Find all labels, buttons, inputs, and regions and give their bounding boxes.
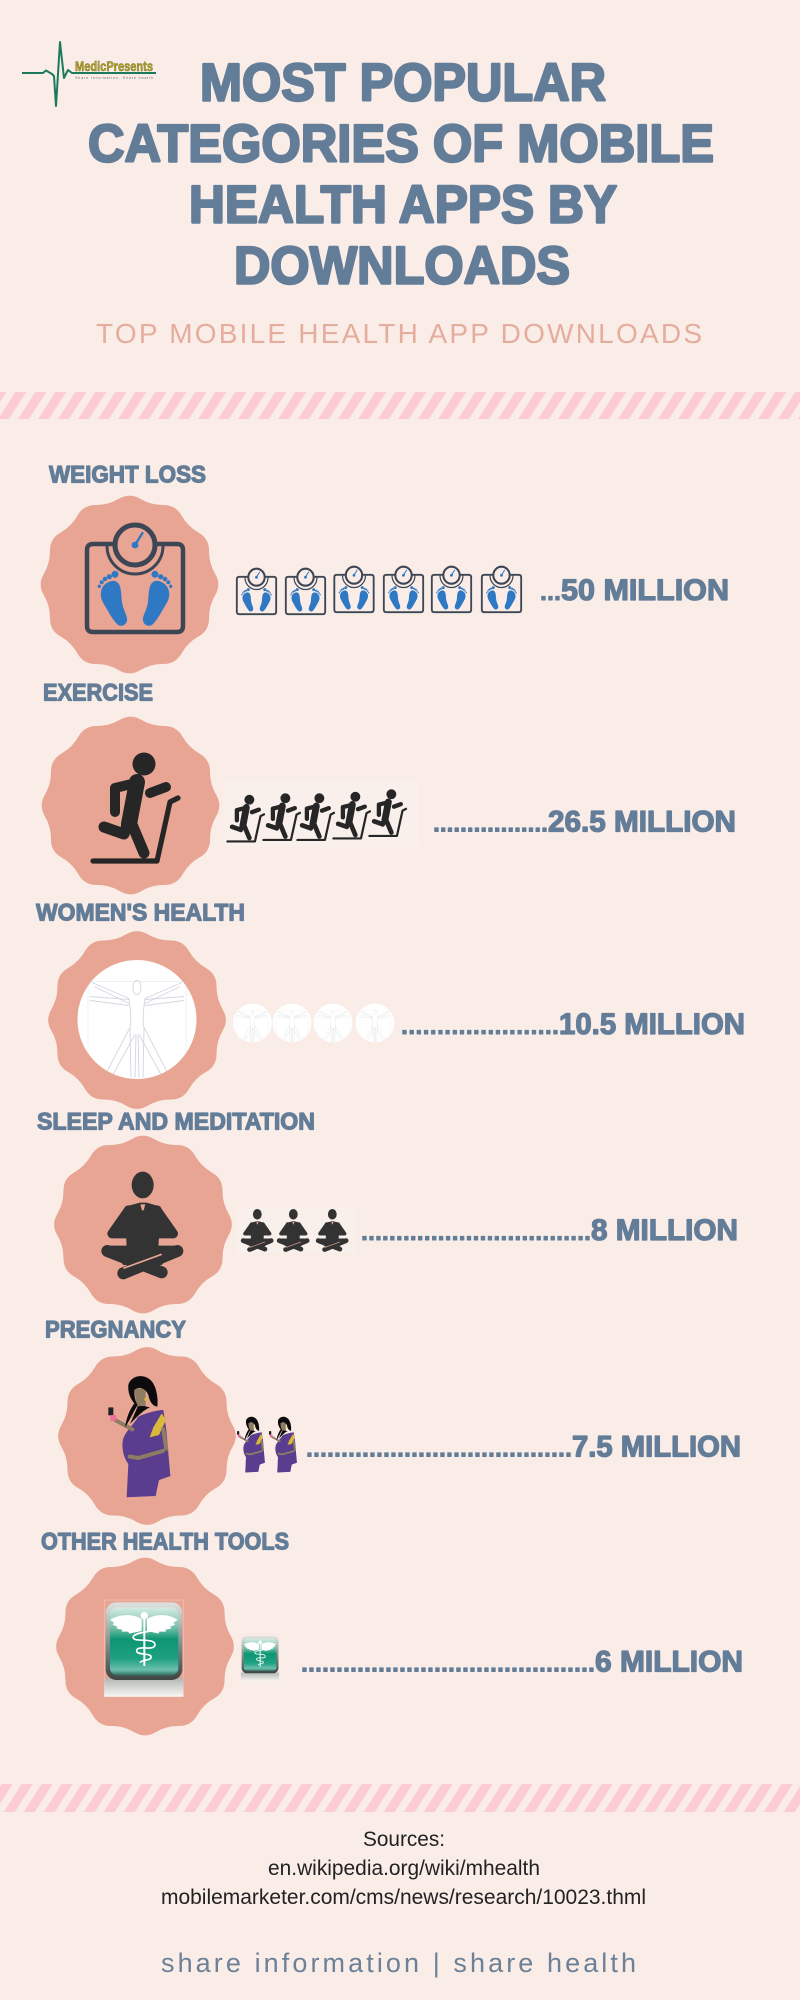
panel: exercise bbox=[42, 680, 736, 894]
sources: en.wikipedia.org/wiki/mhealth bbox=[268, 1857, 540, 1880]
pictogram row: four figures bbox=[233, 1004, 394, 1046]
value: 8 million bbox=[361, 1214, 738, 1247]
panel: pregnancy bbox=[45, 1316, 741, 1525]
value: 8 million: 8 MILLION bbox=[591, 1214, 738, 1247]
pictogram row: three meditators bbox=[237, 1207, 356, 1253]
value: 6 million bbox=[301, 1646, 743, 1678]
tagline: share information | share health bbox=[161, 1948, 636, 1978]
heading: sleep and meditation: SLEEP AND MEDITATION bbox=[37, 1108, 315, 1136]
value: 26.5 million: ................. bbox=[433, 810, 548, 838]
value: 6 million: .......................................... bbox=[301, 1650, 595, 1678]
title: CATEGORIES OF MOBILE bbox=[88, 114, 714, 174]
heading: weight loss: WEIGHT LOSS bbox=[49, 462, 206, 488]
panel: women's health bbox=[36, 900, 745, 1109]
value: 10.5 million: ...................... bbox=[401, 1012, 559, 1040]
value: 26.5 million bbox=[433, 806, 736, 838]
logo: MedicPresents: Share information, Share health bbox=[75, 76, 153, 80]
pictogram row: five runners bbox=[224, 782, 418, 847]
sources bbox=[161, 1828, 646, 1909]
value: 50 million: ... bbox=[540, 578, 561, 606]
value: 10.5 million: 10.5 MILLION bbox=[559, 1008, 745, 1041]
badge: meditation icon bbox=[54, 1136, 232, 1313]
heading: pregnancy: PREGNANCY bbox=[45, 1316, 186, 1344]
sources: Sources: bbox=[363, 1828, 445, 1851]
subtitle: TOP MOBILE HEALTH APP DOWNLOADS bbox=[96, 318, 702, 349]
pictogram row: two women bbox=[237, 1417, 297, 1472]
value: 6 million: 6 MILLION bbox=[595, 1646, 743, 1678]
value: 8 million: ................................. bbox=[361, 1218, 591, 1246]
title: DOWNLOADS bbox=[234, 236, 570, 296]
badge: caduceus app icon bbox=[56, 1558, 234, 1735]
title: HEALTH APPS BY bbox=[189, 176, 617, 234]
heading: exercise: EXERCISE bbox=[43, 680, 153, 706]
logo: MedicPresents: MedicPresents bbox=[75, 59, 153, 74]
value: 10.5 million bbox=[401, 1008, 745, 1041]
badge: weight scale icon bbox=[41, 496, 218, 673]
value: 50 million: 50 MILLION bbox=[561, 574, 729, 607]
pictogram row: six scales bbox=[237, 567, 521, 614]
sources: mobilemarketer.com/cms/news/research/10023.thml bbox=[161, 1886, 646, 1909]
badge: vitruvian woman icon bbox=[48, 931, 226, 1109]
heading: other health tools: OTHER HEALTH TOOLS bbox=[41, 1528, 289, 1556]
pictogram: one app icon bbox=[241, 1635, 279, 1681]
heading: women's health: WOMEN'S HEALTH bbox=[36, 900, 245, 926]
panel: sleep and meditation bbox=[37, 1108, 738, 1313]
panel: weight loss bbox=[41, 462, 729, 673]
value: 7.5 million: 7.5 MILLION bbox=[572, 1430, 741, 1464]
value: 26.5 million: 26.5 MILLION bbox=[548, 806, 736, 838]
badge: pregnant woman icon bbox=[58, 1347, 236, 1525]
value: 7.5 million bbox=[306, 1430, 741, 1464]
logo: MedicPresents bbox=[22, 42, 156, 106]
badge: treadmill runner icon bbox=[42, 717, 219, 894]
value: 7.5 million: ...................................... bbox=[306, 1434, 572, 1462]
title bbox=[88, 54, 714, 296]
title: MOST POPULAR bbox=[200, 54, 606, 112]
panel: other health tools bbox=[41, 1528, 743, 1735]
